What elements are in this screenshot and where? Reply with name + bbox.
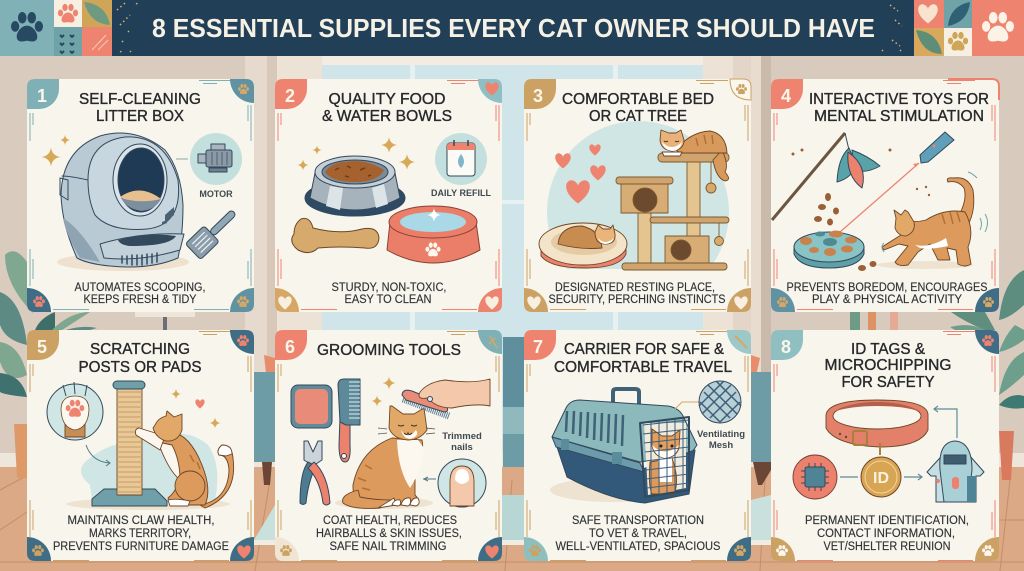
heading: ID TAGS & (851, 341, 925, 358)
motor callout (176, 133, 242, 199)
caption (786, 282, 988, 306)
caption (548, 282, 726, 306)
caption: AUTOMATES SCOOPING, (74, 282, 206, 294)
caption: MAINTAINS CLAW HEALTH, (68, 515, 214, 527)
icon: comb (338, 379, 360, 462)
heading: CARRIER FOR SAFE & (564, 341, 724, 358)
icon: bone chew (292, 218, 379, 253)
heading (78, 341, 202, 376)
caption: VET/SHELTER REUNION (824, 541, 950, 553)
number badge 4 (771, 79, 803, 109)
arrow (86, 445, 110, 466)
motor callout: MOTOR (199, 189, 233, 199)
icon: food bowl (305, 156, 405, 216)
caption: STURDY, NON-TOXIC, (332, 282, 446, 294)
heading: LITTER BOX (96, 108, 184, 125)
panel: 1 self-cleaning litter box (27, 79, 254, 312)
heading: MICROCHIPPING (824, 357, 952, 374)
caption: MARKS TERRITORY, (89, 528, 191, 540)
icon: scoop (185, 204, 242, 260)
sofa: right (751, 355, 771, 485)
icon: collar (826, 400, 928, 455)
icon: water bowl (387, 206, 480, 263)
icon: litter robot (42, 133, 242, 271)
corner ornaments (524, 79, 751, 312)
caption (316, 515, 462, 553)
number badge 2 (275, 79, 307, 109)
plant: left (0, 251, 97, 478)
heading: GROOMING TOOLS (317, 342, 461, 359)
icon: hand with brush (402, 379, 490, 416)
heading (562, 91, 714, 125)
connector arrows (840, 406, 957, 480)
heading: INTERACTIVE TOYS FOR (809, 91, 989, 108)
caption: SAFE NAIL TRIMMING (330, 541, 447, 553)
daily refill callout (431, 133, 491, 198)
caption: HAIRBALLS & SKIN ISSUES, (316, 528, 462, 540)
panel: 5 scratching posts (27, 330, 254, 561)
heading: FOR SAFETY (842, 374, 935, 391)
heading: QUALITY FOOD (328, 91, 446, 108)
icon: laser pointer and beam (840, 132, 954, 232)
left pattern tiles (0, 0, 138, 56)
teal backdrop (81, 434, 217, 500)
heading: POSTS OR PADS (78, 359, 202, 376)
panel: 6 grooming tools (275, 330, 502, 561)
trimmed nails callout (423, 431, 486, 507)
caption: WELL-VENTILATED, SPACIOUS (556, 541, 721, 553)
ventilating mesh callout (675, 381, 745, 451)
caption: PERMANENT IDENTIFICATION, (805, 515, 969, 527)
corner ornaments (275, 79, 502, 312)
trimmed nails callout: nails (451, 442, 473, 453)
heading: SCRATCHING (90, 341, 190, 358)
panel: 7 carrier (524, 330, 751, 561)
icon: scratching cat (135, 411, 234, 508)
icon: scanner and shelter (927, 441, 984, 502)
caption (332, 282, 446, 306)
corner ornaments (27, 79, 254, 312)
icon: microchip (793, 455, 837, 499)
corner ornaments (771, 79, 999, 312)
corner ornaments (771, 330, 999, 561)
caption: PREVENTS BOREDOM, ENCOURAGES (786, 282, 988, 294)
number badge 3 (524, 79, 556, 109)
number badge 6 (275, 330, 307, 360)
caption: PLAY & PHYSICAL ACTIVITY (812, 294, 962, 306)
teal backdrop (547, 121, 729, 269)
icon: sitting cat (335, 406, 435, 509)
caption: SECURITY, PERCHING INSTINCTS (548, 294, 726, 306)
panel: 2 food and water bowls (275, 79, 502, 312)
icon: id tag: ID (873, 470, 889, 487)
number badge 3: 3 (533, 86, 543, 106)
caption: CONTACT INFORMATION, (817, 528, 955, 540)
icon: id tag (861, 457, 901, 497)
heading: COMFORTABLE TRAVEL (554, 359, 732, 376)
hearts (555, 144, 606, 204)
panel: 3 bed or cat tree (524, 79, 751, 312)
paw closeup (47, 382, 103, 440)
caption: KEEPS FRESH & TIDY (84, 294, 197, 306)
icon: scratching post (92, 381, 167, 506)
icon: slicker brush (291, 385, 332, 428)
heading (79, 91, 201, 125)
icon: puzzle feeder (794, 230, 864, 268)
heading (554, 341, 732, 376)
right pattern tiles (882, 0, 1024, 56)
daily refill callout: DAILY REFILL (431, 188, 491, 198)
caption (805, 515, 969, 553)
panel: 4 interactive toys (771, 79, 999, 312)
icon: cat tree (616, 153, 729, 270)
number badge 5: 5 (37, 337, 47, 357)
caption: DESIGNATED RESTING PLACE, (555, 282, 715, 294)
corner ornaments (27, 330, 254, 561)
header banner (0, 0, 1024, 56)
title: 8 ESSENTIAL SUPPLIES EVERY CAT OWNER SHOULD HAVE (152, 13, 875, 43)
heading: SELF-CLEANING (79, 91, 201, 108)
heading (809, 91, 989, 125)
heading (824, 341, 952, 391)
number badge 6: 6 (285, 337, 295, 357)
corner ornaments (275, 330, 502, 561)
caption: SAFE TRANSPORTATION (572, 515, 704, 527)
panel: 8 id tags and microchipping (771, 330, 999, 561)
sparkles and heart (171, 389, 220, 428)
cat on perch (660, 130, 728, 181)
caption: TO VET & TRAVEL, (589, 528, 687, 540)
heading: OR CAT TREE (589, 108, 687, 125)
sofa: left (254, 337, 524, 485)
icon: pet carrier (550, 389, 697, 503)
icon: nail clippers (300, 441, 330, 505)
kitten inside (644, 423, 686, 495)
heading (322, 91, 452, 125)
trimmed nails callout: Trimmed (442, 431, 482, 442)
caption (53, 515, 229, 553)
caption (74, 282, 206, 306)
icon: feather wand (772, 133, 880, 220)
number badge 8: 8 (781, 337, 791, 357)
caption: COAT HEALTH, REDUCES (323, 515, 457, 527)
cat bed (539, 223, 627, 268)
number badge 7 (524, 330, 556, 360)
number badge 1 (27, 79, 59, 109)
icon: playing cat (877, 172, 988, 269)
ventilating mesh callout: Mesh (709, 440, 733, 451)
caption: PREVENTS FURNITURE DAMAGE (53, 541, 229, 553)
icon: treat kibble (792, 148, 930, 271)
ventilating mesh callout: Ventilating (697, 429, 745, 440)
caption: EASY TO CLEAN (344, 294, 432, 306)
number badge 4: 4 (781, 86, 791, 106)
caption (556, 515, 721, 553)
heading: & WATER BOWLS (322, 108, 452, 125)
number badge 7: 7 (533, 337, 543, 357)
sparkles (372, 376, 396, 406)
corner ornaments (524, 330, 751, 561)
plant: right (950, 270, 1024, 480)
sparkles (298, 137, 415, 170)
number badge 2: 2 (285, 86, 295, 106)
number badge 1: 1 (37, 86, 47, 106)
number badge 5 (27, 330, 59, 360)
heading: COMFORTABLE BED (562, 91, 714, 108)
number badge 8 (771, 330, 803, 360)
heading: MENTAL STIMULATION (814, 108, 984, 125)
